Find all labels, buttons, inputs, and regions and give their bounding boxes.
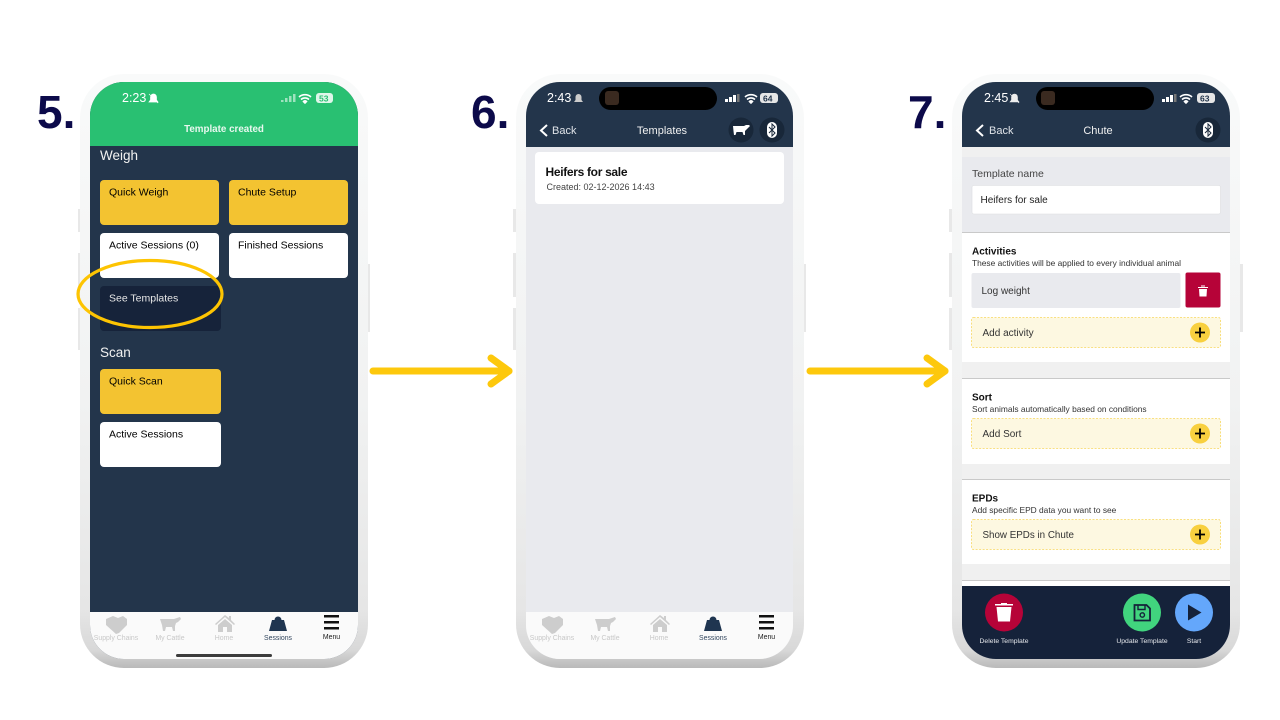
header: Templates (637, 125, 688, 137)
activities section: Add activity (982, 328, 1034, 339)
phone 3 screen (962, 82, 1230, 659)
tab bar (526, 612, 793, 659)
phone 1: weigh menu (78, 74, 370, 668)
update template button: Update Template (1116, 638, 1168, 645)
tab bar: Supply Chains (94, 635, 139, 642)
tab bar: Supply Chains (530, 635, 575, 642)
sort section (962, 378, 1230, 464)
phone 2 screen (526, 82, 793, 659)
button: Quick Weigh (100, 180, 219, 225)
activities section: Activities (972, 246, 1017, 258)
arrow 6 to 7 (810, 358, 945, 384)
activities section (962, 232, 1230, 362)
green banner: Template created (184, 124, 264, 135)
button: See Templates: See Templates (109, 292, 178, 304)
phone 2 frame (513, 74, 806, 668)
button: Chute Setup: Chute Setup (238, 186, 297, 198)
button: Finished Sessions (229, 233, 348, 278)
dynamic island (1036, 87, 1154, 110)
sort section: Add Sort (982, 429, 1022, 440)
sort section: Sort animals automatically based on conditions (972, 404, 1147, 414)
EPDs section: Show EPDs in Chute (982, 530, 1075, 541)
phone 3: chute template (949, 74, 1243, 668)
tab bar: Sessions (699, 635, 728, 642)
EPDs section: EPDs (972, 494, 999, 504)
phone 1 frame (78, 74, 370, 668)
EPDs section (962, 479, 1230, 564)
button: Quick Scan: Quick Scan (109, 376, 163, 388)
phone 3 frame (949, 74, 1243, 668)
arrow 5 to 6 (373, 358, 509, 384)
green banner: 2:23 (122, 91, 146, 105)
dynamic island (599, 87, 717, 110)
header: 63 (1200, 94, 1210, 104)
tab bar: Sessions (264, 635, 293, 642)
phone 2: templates list (513, 74, 806, 668)
tab bar: Menu (758, 634, 775, 641)
template name section (972, 170, 1221, 214)
phone 1 screen (90, 82, 358, 659)
EPDs section: Add specific EPD data you want to see (972, 505, 1117, 515)
activities section: Log weight (982, 286, 1030, 297)
header: Chute (1083, 125, 1113, 137)
header: 2:43 (547, 91, 571, 105)
button: Active Sessions scan (100, 422, 221, 467)
button: Quick Scan (100, 369, 221, 414)
header: Back (989, 125, 1014, 137)
template card: Created: 02-12-2026 14:43 (546, 182, 655, 192)
tab bar: My Cattle (590, 635, 620, 642)
update template button (1116, 594, 1168, 645)
start button (1175, 594, 1213, 645)
activities section: These activities will be applied to every individual animal (972, 258, 1181, 268)
template card (535, 152, 784, 204)
bottom action bar (962, 586, 1230, 659)
heading: Scan: Scan (100, 345, 131, 360)
button: Finished Sessions: Finished Sessions (238, 240, 323, 252)
step number 5: 5. (37, 86, 75, 138)
button: Chute Setup (229, 180, 348, 225)
tab bar: My Cattle (155, 635, 185, 642)
button: Active Sessions: Active Sessions (0) (109, 240, 199, 252)
delete template button: Delete Template (980, 638, 1029, 645)
header (526, 82, 793, 147)
tab bar: Menu (323, 634, 340, 641)
green banner (90, 82, 358, 146)
tab bar: Home (650, 635, 668, 642)
callout ellipse around See Templates (78, 260, 222, 328)
heading: Weigh: Weigh (100, 148, 138, 163)
button: See Templates (100, 286, 221, 331)
green banner: 53 (319, 94, 329, 104)
button: Active Sessions (100, 233, 219, 278)
header: Back (552, 125, 577, 137)
start button: Start (1187, 638, 1201, 645)
header (962, 82, 1230, 147)
template name section: Template name (972, 168, 1044, 180)
template name section: Heifers for sale (980, 195, 1048, 206)
button: Quick Weigh: Quick Weigh (109, 186, 168, 198)
header: 2:45 (984, 91, 1008, 105)
sort section: Sort (972, 392, 993, 404)
step number 6: 6. (471, 86, 509, 138)
header: 64 (763, 94, 773, 104)
button: Active Sessions scan: Active Sessions (109, 428, 183, 440)
tab bar (90, 612, 358, 659)
template card: Heifers for sale (546, 165, 628, 179)
step number 7: 7. (908, 86, 946, 138)
tab bar: Home (215, 635, 233, 642)
delete template button (980, 594, 1029, 645)
